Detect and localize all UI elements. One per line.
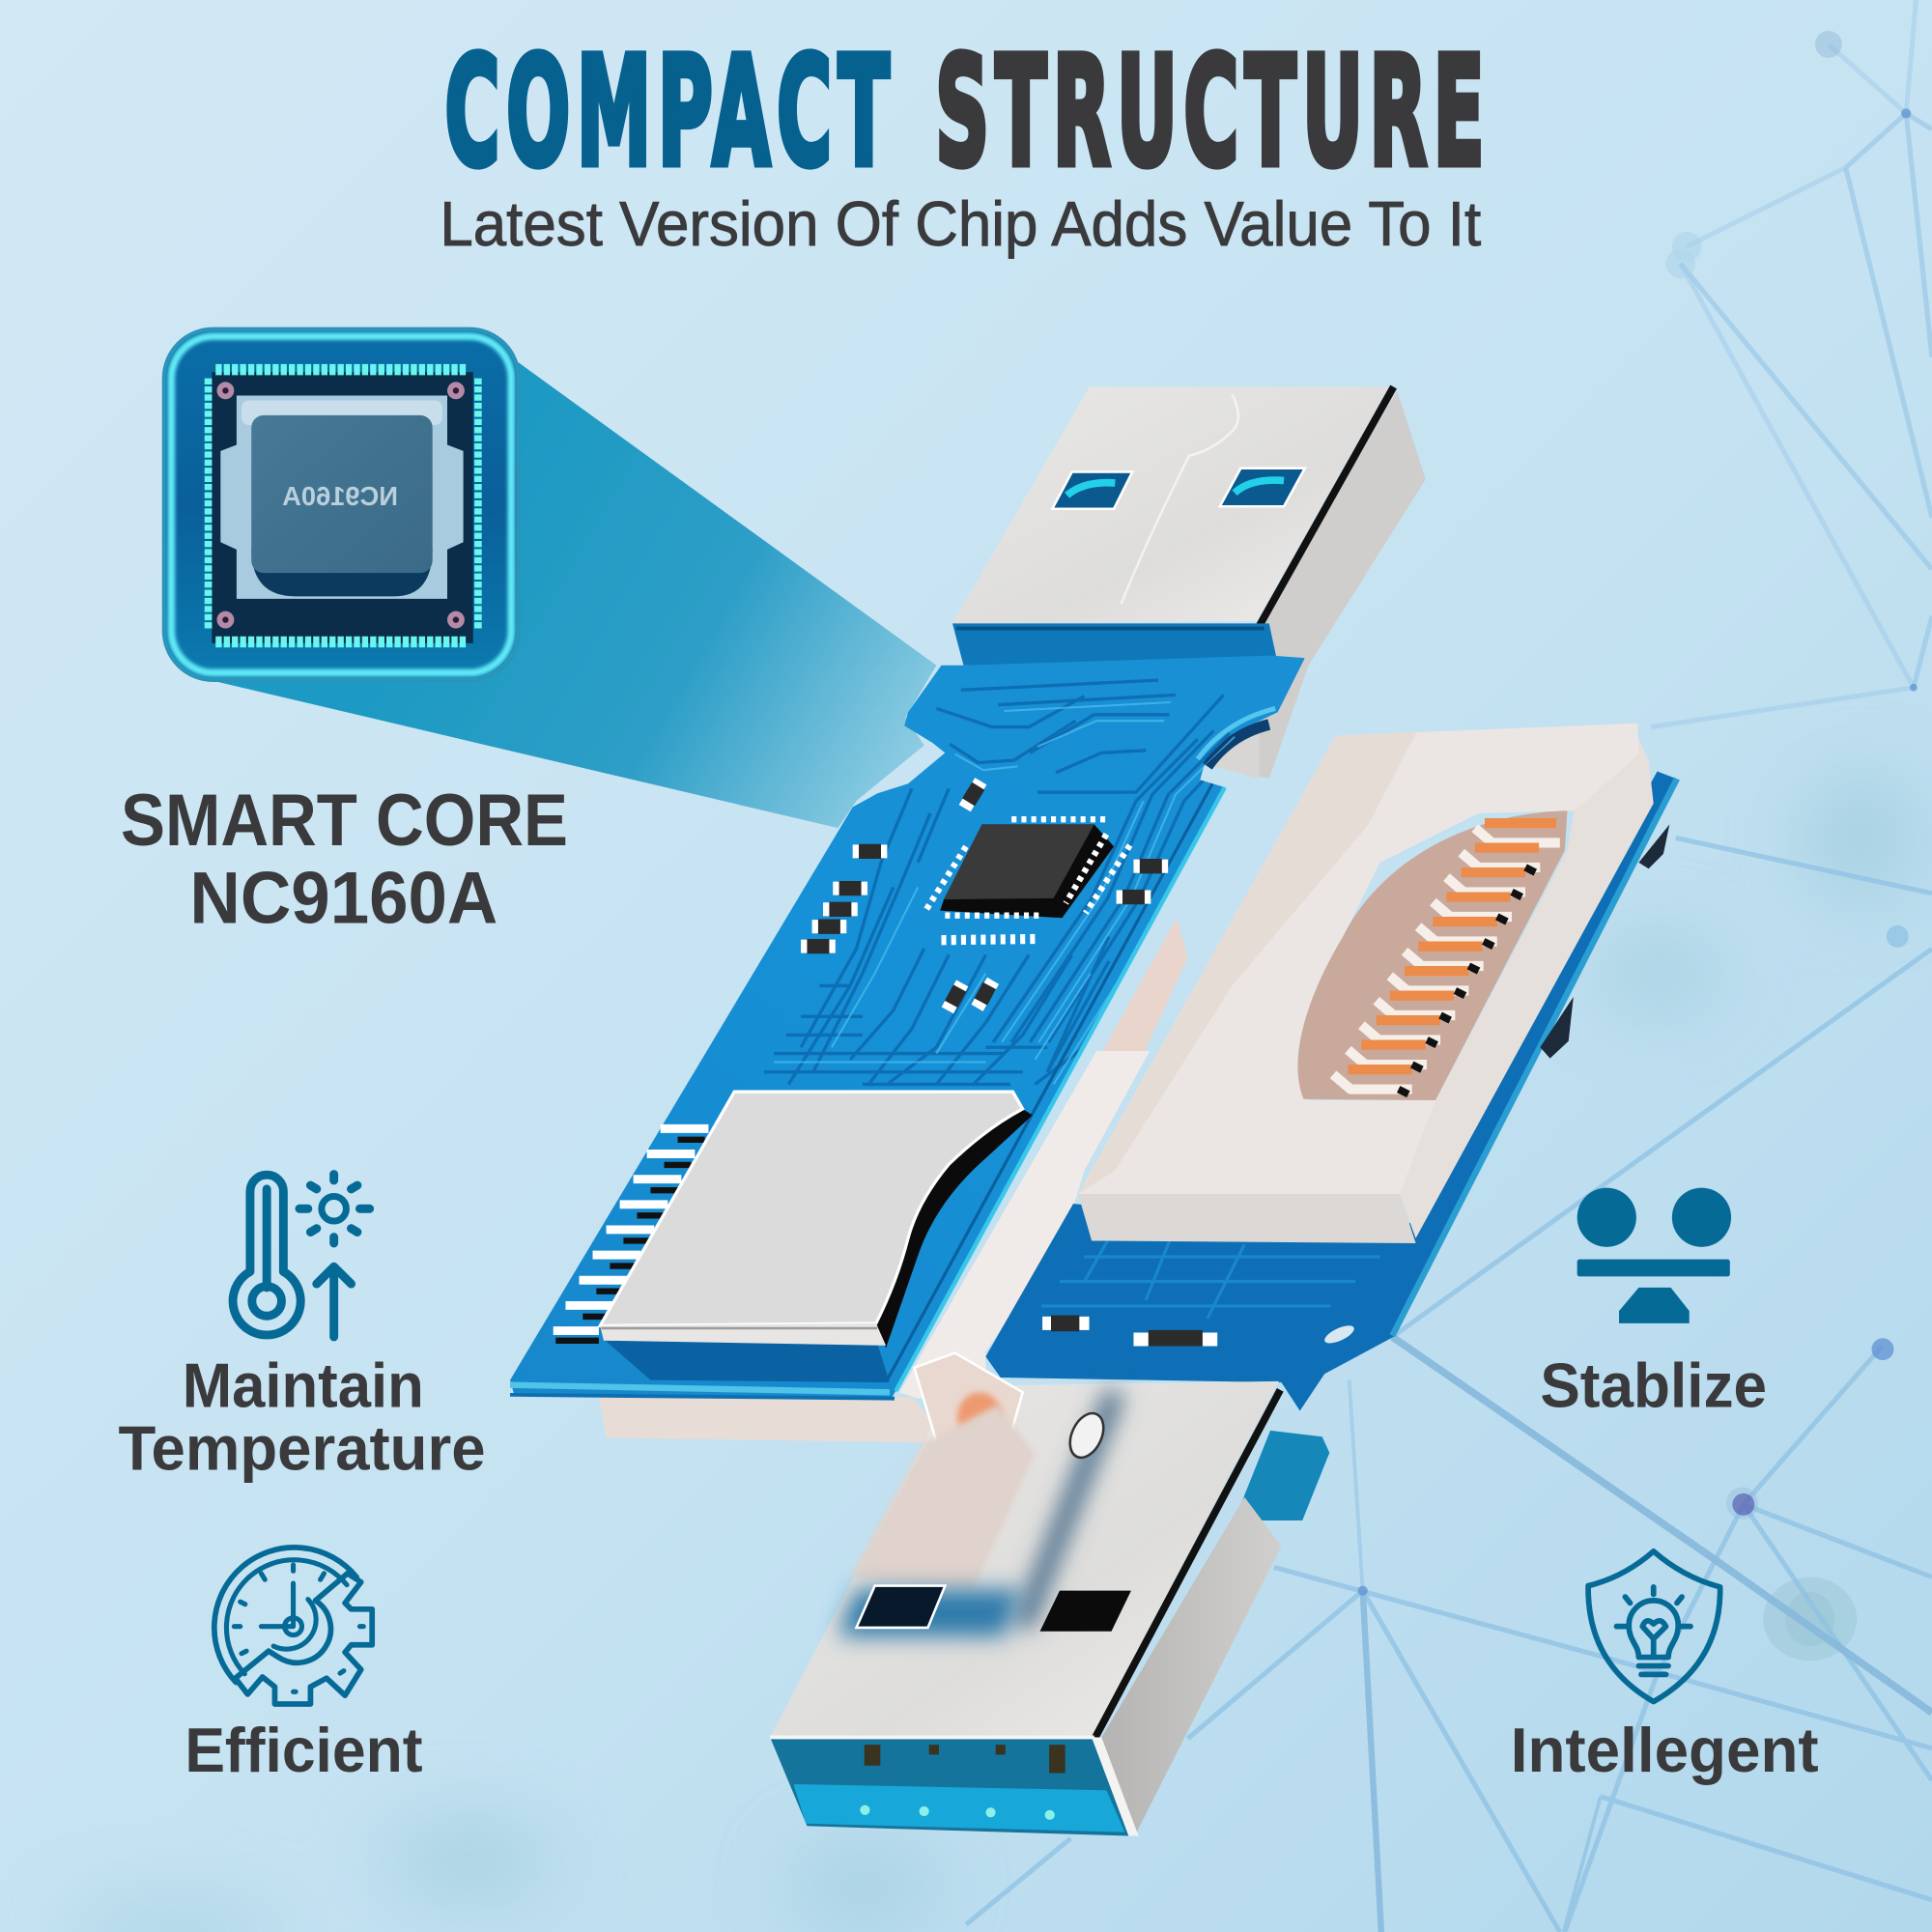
white card connector	[1078, 724, 1654, 1243]
chip body with mirrored marking: NC9160A	[282, 481, 398, 511]
label: smart core	[121, 780, 568, 939]
small components	[801, 781, 1168, 1010]
icon: shield with bulb	[1588, 1551, 1720, 1701]
subtitle: Latest Version Of Chip Adds Value To It	[440, 188, 1481, 259]
white connector rear wall	[1103, 918, 1188, 1051]
icon: clock gear	[214, 1548, 372, 1704]
second circuit board	[985, 771, 1680, 1410]
label: intellegent: Intellegent	[1511, 1715, 1819, 1785]
USB device exploded view	[510, 387, 1680, 1836]
label: maintain temperature: Temperature	[118, 1413, 486, 1484]
USB port opening	[770, 1737, 1128, 1836]
board traces	[764, 680, 1242, 1084]
label: smart core: NC9160A	[189, 857, 497, 939]
main controller chip	[924, 819, 1130, 940]
label: maintain temperature: Maintain	[183, 1350, 424, 1421]
icon: thermometer and sun	[233, 1175, 370, 1337]
contact opening	[1297, 810, 1567, 1100]
lower USB plug	[770, 1353, 1329, 1836]
white strip behind board	[899, 1051, 1150, 1399]
plastic underside	[599, 1395, 955, 1443]
label: efficient: Efficient	[185, 1715, 422, 1785]
main circuit board	[510, 656, 1305, 1399]
title: STRUCTURE	[935, 26, 1491, 201]
spring contacts	[1333, 823, 1560, 1090]
label: stablize: Stablize	[1540, 1350, 1767, 1421]
title	[444, 26, 1491, 201]
title: COMPACT	[444, 26, 895, 201]
gold finger pads	[554, 1128, 708, 1341]
upper USB shell	[952, 387, 1426, 779]
label: maintain temperature	[118, 1350, 486, 1484]
chip heat spreader	[220, 395, 464, 599]
card socket shield	[604, 1339, 890, 1382]
chip body with mirrored marking	[251, 415, 433, 573]
callout beam from chip to board	[215, 357, 936, 828]
chip detail inset	[164, 329, 519, 680]
label: smart core: SMART CORE	[121, 780, 568, 862]
icon: stabilize	[1577, 1188, 1731, 1323]
